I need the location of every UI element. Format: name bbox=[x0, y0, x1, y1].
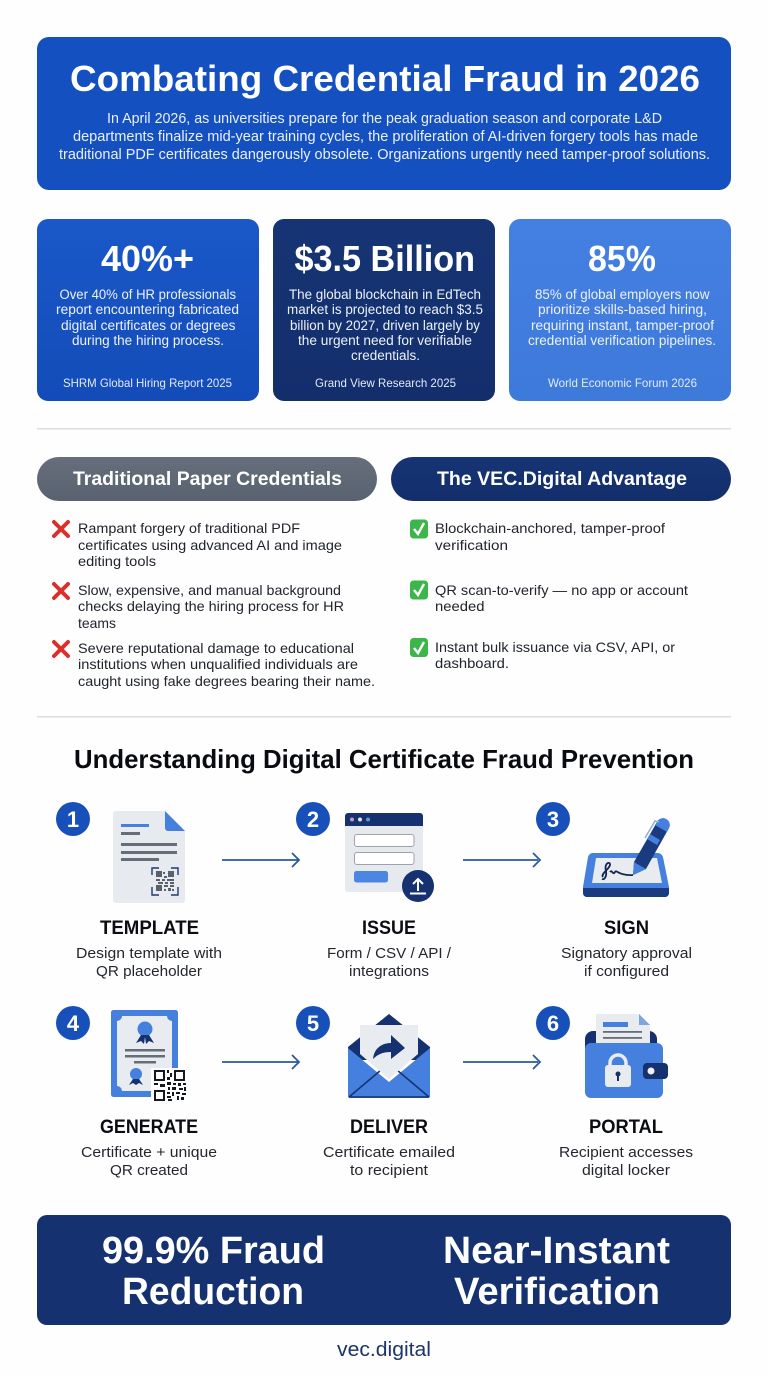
cross item 2: Slow, expensive, and manual background bbox=[78, 582, 341, 598]
comparison column: VEC.Digital bbox=[391, 457, 731, 671]
cross item 1: certificates using advanced AI and image bbox=[78, 537, 342, 553]
icon: document with QR bbox=[113, 811, 185, 903]
title: Combating Credential Fraud in 2026 bbox=[70, 58, 700, 99]
number badge 5: 5 bbox=[307, 1011, 319, 1036]
section heading: Understanding Digital Certificate Fraud Prevention bbox=[74, 744, 694, 774]
stat card: $3.5 Billion: billion by 2027, driven largely by bbox=[290, 318, 480, 333]
stat card: 40%+ bbox=[37, 219, 259, 401]
cross item 3: institutions when unqualified individuals are bbox=[78, 656, 358, 672]
stat card: 40%+: SHRM Global Hiring Report 2025 bbox=[63, 376, 232, 390]
check item 1: verification bbox=[435, 537, 508, 553]
number badge 5 bbox=[296, 1006, 330, 1040]
stat card: 40%+: report encountering fabricated bbox=[56, 302, 239, 317]
number badge 4: 4 bbox=[67, 1011, 80, 1036]
number badge 2: 2 bbox=[307, 807, 319, 832]
stat card: 40%+: Over 40% of HR professionals bbox=[60, 287, 236, 302]
check item 3: dashboard. bbox=[435, 655, 509, 671]
claim: instant verification bbox=[443, 1230, 670, 1313]
check item 3: Instant bulk issuance via CSV, API, or bbox=[435, 639, 675, 655]
check item 1 bbox=[410, 520, 665, 553]
icon: signing tablet and pen bbox=[583, 818, 670, 897]
description bbox=[559, 1145, 693, 1179]
cross item 2: teams bbox=[78, 615, 116, 631]
check item 2: needed bbox=[435, 598, 484, 614]
stat card: $3.5 Billion bbox=[273, 219, 495, 401]
description: Design template with bbox=[76, 946, 222, 962]
stat card: 40%+: during the hiring process. bbox=[72, 333, 224, 348]
pill heading: advantage: The VEC.Digital Advantage bbox=[437, 469, 687, 490]
cross item 1 bbox=[54, 520, 342, 569]
cross item 1: editing tools bbox=[78, 553, 156, 569]
description: Recipient accesses bbox=[559, 1145, 693, 1161]
number badge 3: 3 bbox=[547, 807, 559, 832]
number badge 4 bbox=[56, 1006, 90, 1040]
stat card: 85%: World Economic Forum 2026 bbox=[548, 376, 697, 390]
description bbox=[327, 946, 452, 980]
pill heading: traditional bbox=[37, 457, 377, 501]
label: DELIVER: DELIVER bbox=[350, 1117, 428, 1138]
stat card: $3.5 Billion: $3.5 Billion bbox=[294, 238, 475, 279]
claim: fraud reduction: 99.9% Fraud bbox=[102, 1230, 325, 1272]
number badge 2 bbox=[296, 802, 330, 836]
description: Signatory approval bbox=[561, 946, 692, 962]
bottom banner bbox=[37, 1215, 731, 1325]
arrow 4 to 5 bbox=[222, 1055, 299, 1069]
description bbox=[323, 1145, 455, 1179]
intro text: traditional PDF certificates dangerously obsolete. Organizations urgently need tamper-proof solutions. bbox=[59, 147, 710, 163]
label: TEMPLATE: TEMPLATE bbox=[100, 918, 199, 939]
cross item 3 bbox=[54, 640, 375, 689]
description: Form / CSV / API / bbox=[327, 946, 452, 962]
icon: open envelope with letter bbox=[348, 1014, 430, 1098]
icon: certificate with QR bbox=[111, 1010, 188, 1103]
label: PORTAL: PORTAL bbox=[589, 1117, 663, 1138]
check item 2 bbox=[410, 580, 688, 614]
number badge 1 bbox=[56, 802, 90, 836]
intro text bbox=[59, 111, 710, 163]
arrow 2 to 3 bbox=[463, 853, 540, 867]
description: Certificate + unique bbox=[81, 1145, 217, 1161]
footer website: vec.digital bbox=[337, 1339, 431, 1361]
stat card: 85%: requiring instant, tamper-proof bbox=[531, 318, 714, 333]
cross item 2: checks delaying the hiring process for HR bbox=[78, 598, 344, 614]
label: GENERATE: GENERATE bbox=[100, 1117, 198, 1138]
step 1: template bbox=[56, 802, 222, 980]
check item 2: QR scan-to-verify — no app or account bbox=[435, 582, 688, 598]
icon: form upload bbox=[345, 813, 434, 902]
description bbox=[76, 946, 222, 980]
pill heading: traditional: Traditional Paper Credentials bbox=[73, 469, 342, 490]
claim: fraud reduction: Reduction bbox=[122, 1271, 304, 1313]
stat card: 85%: 85% of global employers now bbox=[535, 287, 710, 302]
label: SIGN: SIGN bbox=[604, 918, 649, 939]
stat card: 85%: 85% bbox=[588, 238, 656, 279]
description bbox=[81, 1145, 217, 1179]
stat card: $3.5 Billion: Grand View Research 2025 bbox=[315, 376, 456, 390]
claim: instant verification: Verification bbox=[454, 1271, 660, 1313]
cross item 3: Severe reputational damage to educational bbox=[78, 640, 354, 656]
check item 3 bbox=[410, 638, 675, 671]
number badge 1: 1 bbox=[67, 807, 79, 832]
step 6: portal bbox=[536, 1006, 693, 1179]
number badge 6 bbox=[536, 1006, 570, 1040]
stat card: $3.5 Billion: credentials. bbox=[351, 348, 420, 363]
step 3: sign bbox=[536, 802, 692, 980]
claim: instant verification: Near-Instant bbox=[443, 1230, 670, 1272]
cross item 2 bbox=[54, 582, 344, 631]
stat card: 85% bbox=[509, 219, 731, 401]
description: integrations bbox=[349, 964, 429, 980]
number badge 6: 6 bbox=[547, 1011, 559, 1036]
stat card: $3.5 Billion: the urgent need for verifiable bbox=[298, 333, 472, 348]
stat card: 40%+: 40%+ bbox=[101, 238, 194, 279]
stat card: $3.5 Billion: The global blockchain in EdTech bbox=[289, 287, 481, 302]
intro text: departments finalize mid-year training cycles, the proliferation of AI-driven forgery tools has made bbox=[73, 129, 698, 145]
arrow 1 to 2 bbox=[222, 853, 299, 867]
description bbox=[561, 946, 692, 980]
header panel bbox=[37, 37, 731, 190]
description: Certificate emailed bbox=[323, 1145, 455, 1161]
stat card: 85%: credential verification pipelines. bbox=[528, 333, 716, 348]
arrow 5 to 6 bbox=[463, 1055, 540, 1069]
intro text: In April 2026, as universities prepare for the peak graduation season and corporate L&D bbox=[107, 111, 662, 127]
stat card: 40%+: digital certificates or degrees bbox=[61, 318, 236, 333]
claim: fraud reduction bbox=[102, 1230, 325, 1313]
description: to recipient bbox=[350, 1163, 428, 1179]
description: digital locker bbox=[582, 1163, 670, 1179]
icon: wallet with lock bbox=[585, 1014, 668, 1098]
description: if configured bbox=[584, 964, 669, 980]
step 2: issue bbox=[296, 802, 452, 980]
comparison column: traditional bbox=[37, 457, 377, 689]
check item 1: Blockchain-anchored, tamper-proof bbox=[435, 520, 665, 536]
pill heading: advantage bbox=[391, 457, 731, 501]
number badge 3 bbox=[536, 802, 570, 836]
stat card: $3.5 Billion: market is projected to reach $3.5 bbox=[287, 302, 483, 317]
description: QR placeholder bbox=[96, 964, 202, 980]
description: QR created bbox=[110, 1163, 188, 1179]
cross item 1: Rampant forgery of traditional PDF bbox=[78, 520, 300, 536]
stat card: 85%: prioritize skills-based hiring, bbox=[538, 302, 707, 317]
step 5: deliver bbox=[296, 1006, 455, 1179]
step 4: generate bbox=[56, 1006, 217, 1179]
cross item 3: caught using fake degrees bearing their name. bbox=[78, 673, 375, 689]
label: ISSUE: ISSUE bbox=[362, 918, 416, 939]
